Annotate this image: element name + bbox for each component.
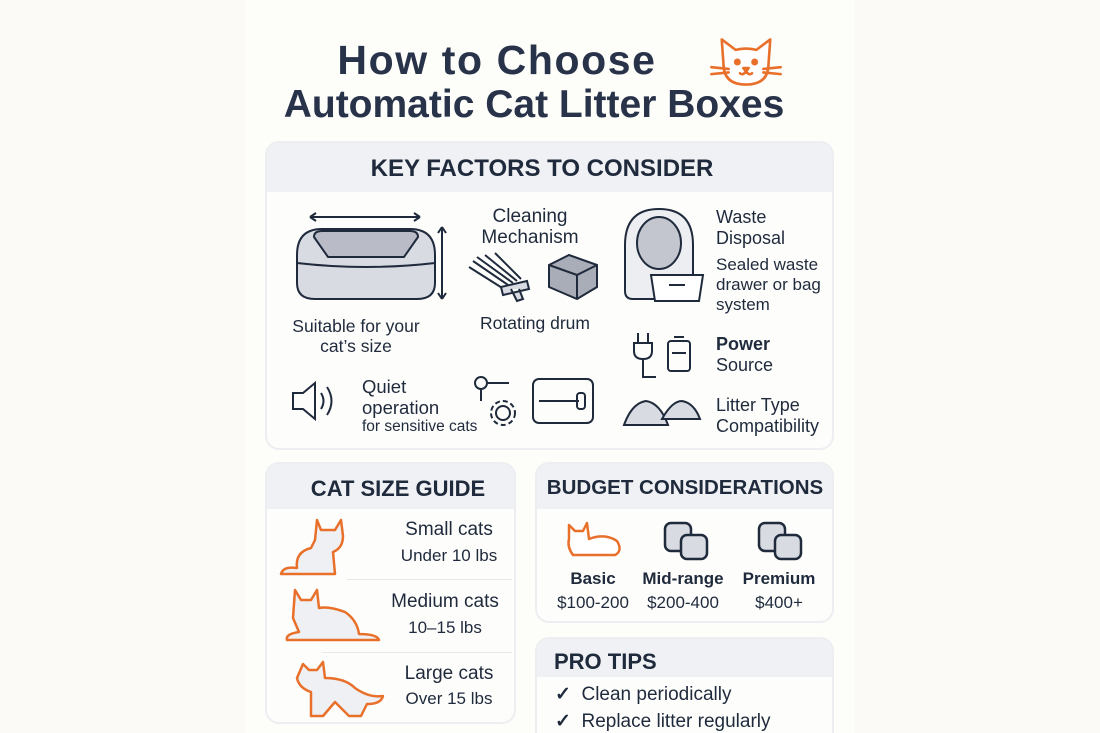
icon: cat head [710,38,782,86]
item: premium: Premium [743,569,815,588]
list: tips: ✓ Clean periodically [555,684,731,705]
item: basic: $100-200 [557,593,629,612]
icon: sensor, gear, box [474,376,594,426]
icon: waste disposal unit [624,208,704,302]
panel: key factors: Sealed waste [716,255,818,274]
heading: cat size guide: CAT SIZE GUIDE [311,476,485,501]
item: mid-range: $200-400 [647,593,719,612]
heading: key factors: KEY FACTORS TO CONSIDER [371,155,713,182]
item: mid-range [642,522,724,612]
item: basic: Basic [570,569,616,588]
text: cat size [292,316,420,356]
text: litter type [716,395,819,436]
row: large cats: Over 15 lbs [406,689,492,708]
list: tips: ✓ Replace litter regularly [555,711,771,732]
panel: pro tips [535,637,834,733]
row: small cats [280,518,497,576]
icon: litter box with size arrows [296,212,447,300]
row: large cats: Large cats [405,663,493,684]
panel: key factors: for sensitive cats [362,418,477,435]
heading: budget [537,464,832,509]
item: basic [557,522,629,612]
heading: budget: BUDGET CONSIDERATIONS [547,476,823,499]
row: large cats [296,660,493,718]
text: waste disposal [716,207,785,248]
list: tips [555,684,771,732]
text: litter type: Litter Type [716,395,800,415]
text: power source: Power [716,334,770,354]
text: quiet operation: operation [362,397,439,418]
text: rotating drum: Rotating drum [480,313,590,333]
icon: plug and battery [633,333,691,378]
page background sheet [245,0,855,733]
item: mid-range: Mid-range [642,569,724,588]
title: Automatic Cat Litter Boxes [284,83,784,126]
panel: key factors [265,141,834,450]
title [284,37,784,126]
text: cat size: Suitable for your [292,316,420,336]
text: cat size: cat’s size [320,336,392,356]
text: cleaning mechanism: Mechanism [481,227,579,248]
panel: key factors: system [716,295,770,314]
text: cleaning mechanism [481,206,579,248]
panel: key factors: drawer or bag [716,275,821,294]
heading: pro tips [537,639,832,677]
heading: cat size guide [267,464,514,509]
panel: budget considerations [535,462,834,623]
row: small cats: Under 10 lbs [401,546,497,565]
text: quiet operation: Quiet [362,376,406,397]
row: medium cats: 10–15 lbs [408,618,482,637]
icon: speaker [292,381,332,421]
icon: litter piles [622,400,702,426]
text: power source [716,334,773,375]
panel: cat size guide [265,462,516,724]
item: premium [743,522,815,612]
title: How to Choose [337,37,657,83]
heading: pro tips: PRO TIPS [554,649,657,674]
text: quiet operation [362,376,439,418]
item: premium: $400+ [755,593,803,612]
row: medium cats: Medium cats [391,591,499,612]
row: medium cats [286,588,499,642]
text: waste disposal: Waste [716,207,766,227]
icon: rake and drum [468,252,598,302]
text: waste disposal: Disposal [716,228,785,248]
row: small cats: Small cats [405,519,493,540]
text: litter type: Compatibility [716,416,819,436]
heading: key factors [267,143,832,192]
text: cleaning mechanism: Cleaning [492,206,568,227]
text: power source: Source [716,355,773,375]
